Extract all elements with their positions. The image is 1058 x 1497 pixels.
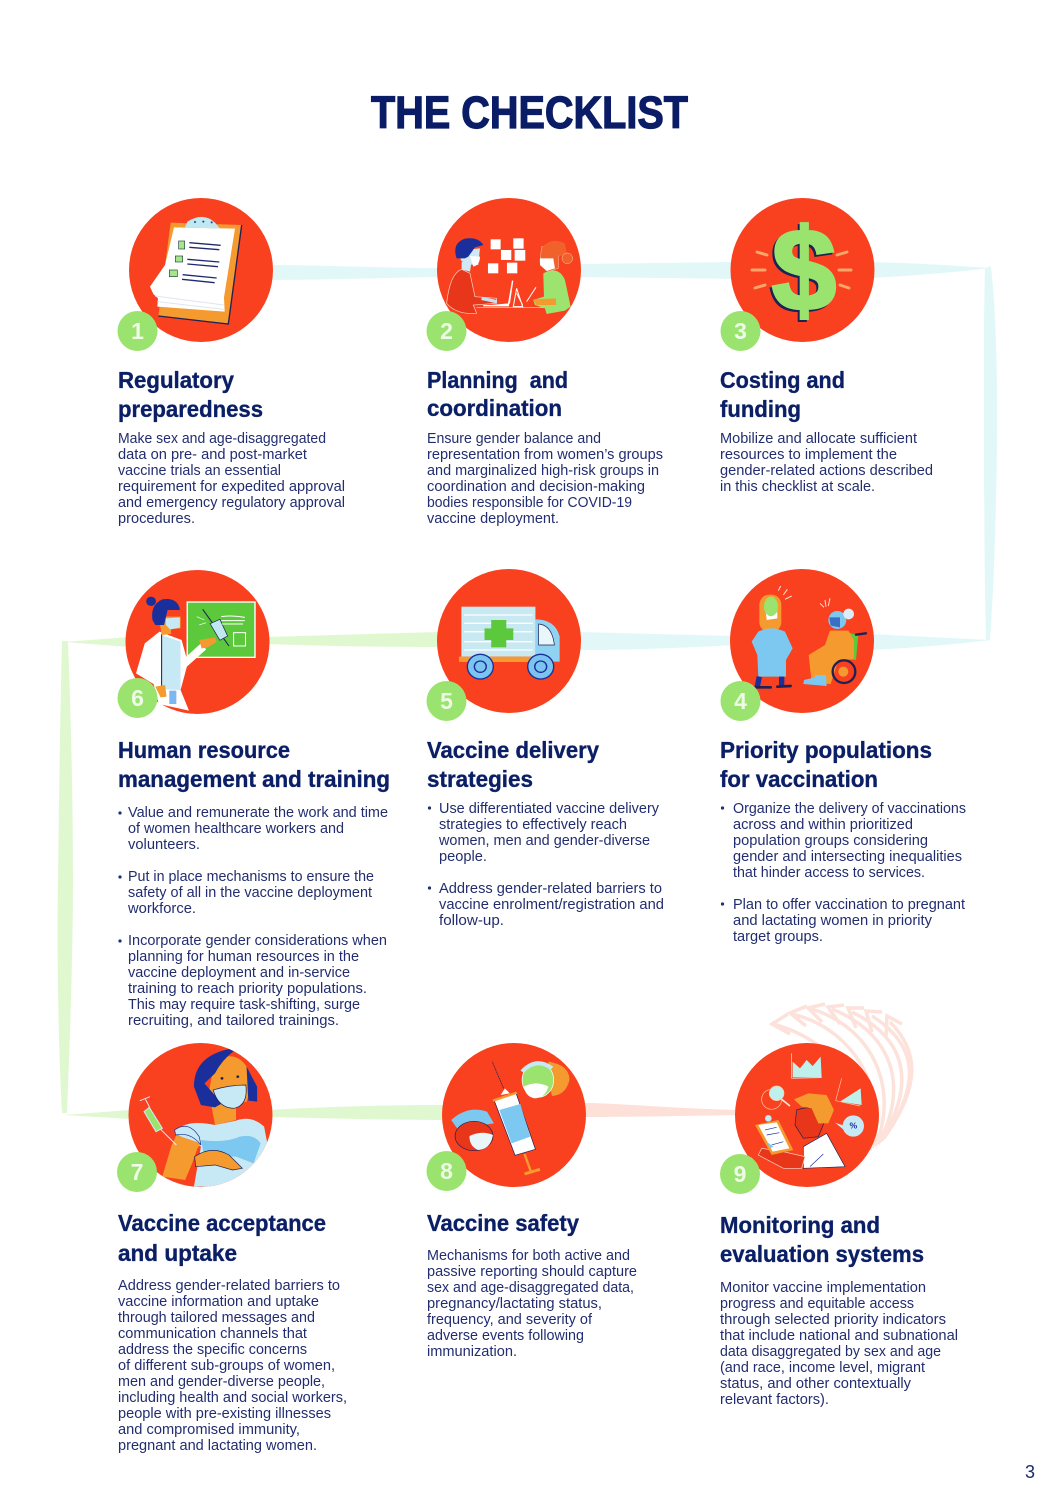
bullet list: target groups. [733, 929, 823, 945]
connector path: cyan segments from step 1 to step 4 [270, 262, 997, 650]
bullet list: vaccine deployment and in-service [128, 965, 350, 981]
body text: requirement for expedited approval [118, 479, 345, 495]
icon: dollar sign: $ [772, 205, 836, 335]
body text: through tailored messages and [118, 1310, 315, 1326]
bullet list: This may require task-shifting, surge [128, 997, 360, 1013]
step number 5 [426, 681, 466, 721]
body text [427, 1248, 637, 1360]
body text: representation from women’s groups [427, 447, 663, 463]
step number 9 [720, 1154, 760, 1194]
heading: Regulatory [118, 367, 234, 393]
heading: Vaccine acceptance [118, 1210, 326, 1236]
step number 7 [117, 1152, 157, 1192]
heading: preparedness [118, 396, 263, 422]
icon: masked woman receiving a vaccine [128, 1043, 272, 1187]
body text: relevant factors). [720, 1392, 829, 1408]
bullet list: volunteers. [128, 837, 200, 853]
body text: data on pre- and post-market [118, 447, 307, 463]
bullet list: Organize the delivery of vaccinations [733, 801, 966, 817]
body text: in this checklist at scale. [720, 479, 875, 495]
bullet list: women, men and gender-diverse [438, 833, 650, 849]
bullet list [118, 805, 388, 1029]
bullet list: of women healthcare workers and [128, 821, 344, 837]
step number 8: 8 [440, 1158, 453, 1184]
body text: vaccine information and uptake [118, 1294, 319, 1310]
heading: evaluation systems [720, 1241, 924, 1267]
panel: step 9 monitoring and evaluation systems [720, 1043, 958, 1408]
icon: ambulance truck [437, 569, 581, 713]
connector path: pale red segment from step 8 to step 9 [582, 1103, 738, 1117]
step number 1 [118, 311, 158, 351]
body text: pregnant and lactating women. [118, 1438, 317, 1454]
heading [720, 367, 845, 422]
body text: address the specific concerns [118, 1342, 307, 1358]
heading: Monitoring and [720, 1212, 880, 1238]
bullet list: workforce. [127, 901, 196, 917]
bullet list: population groups considering [733, 833, 928, 849]
bullet list: Address gender-related barriers to [439, 881, 662, 897]
heading: Costing and [720, 367, 845, 393]
bullet list: recruiting, and tailored trainings. [128, 1013, 339, 1029]
body text: pregnancy/lactating status, [427, 1296, 602, 1312]
body text: bodies responsible for COVID-19 [427, 495, 632, 511]
heading: funding [720, 396, 801, 422]
body text: adverse events following [427, 1328, 584, 1344]
body text: and emergency regulatory approval [118, 495, 345, 511]
heading [720, 737, 932, 792]
body text [720, 1280, 958, 1408]
panel: step 7 vaccine acceptance and uptake [117, 1043, 347, 1454]
step number 8 [426, 1151, 466, 1191]
arrows: return loop above step 9 [772, 1004, 912, 1150]
heading: coordination [427, 395, 562, 421]
heading: management and training [118, 766, 390, 792]
heading [118, 1210, 326, 1266]
icon: dollar sign [730, 198, 874, 342]
heading: Priority populations [720, 737, 932, 763]
body text: that include national and subnational [720, 1328, 958, 1344]
bullet list: Plan to offer vaccination to pregnant [733, 897, 965, 913]
panel: step 1 regulatory preparedness [118, 198, 345, 527]
panel: step 5 vaccine delivery strategies [426, 569, 664, 929]
icon: person reviewing data on a clipboard [735, 1043, 879, 1187]
body text: procedures. [118, 511, 195, 527]
step number 6: 6 [131, 685, 144, 711]
body text: immunization. [427, 1344, 517, 1360]
connector path: green segments from step 5 to step 8 [58, 632, 445, 1120]
panel: step 4 priority populations [720, 569, 966, 945]
bullet list: and lactating women in priority [733, 913, 933, 929]
bullet list: strategies to effectively reach [439, 817, 627, 833]
bullet list: training to reach priority populations. [128, 981, 367, 997]
body text [118, 431, 345, 527]
heading: Planning and [427, 367, 568, 393]
heading [720, 1212, 924, 1267]
panel: step 3 costing and funding [720, 198, 933, 495]
body text: (and race, income level, migrant [720, 1360, 925, 1376]
bullet list: Use differentiated vaccine delivery [439, 801, 660, 817]
icon: clipboard [129, 198, 273, 342]
body text: and marginalized high-risk groups in [427, 463, 659, 479]
heading: Vaccine delivery [427, 737, 599, 763]
panel: step 8 vaccine safety [426, 1043, 637, 1360]
body text: people with pre-existing illnesses [118, 1406, 331, 1422]
step number 5: 5 [440, 688, 453, 714]
step number 4: 4 [734, 688, 747, 714]
body text: vaccine deployment. [427, 511, 559, 527]
icon: woman in hijab and elder in wheelchair [730, 569, 874, 713]
panel: step 2 planning and coordination [426, 198, 663, 527]
step number 9: 9 [734, 1161, 746, 1187]
heading: Vaccine safety [427, 1210, 579, 1236]
icon: person reviewing data on a clipboard: % [849, 1121, 857, 1131]
step number 2: 2 [440, 318, 453, 344]
icon: syringe and two masked faces [442, 1043, 586, 1187]
heading: for vaccination [720, 766, 878, 792]
bullet list: that hinder access to services. [733, 865, 925, 881]
title: THE CHECKLIST [371, 87, 688, 138]
body text: Mobilize and allocate sufficient [720, 431, 917, 447]
page number: 3 [1025, 1462, 1035, 1482]
heading [427, 367, 568, 421]
body text: data disaggregated by sex and age [720, 1344, 941, 1360]
heading: Human resource [118, 737, 290, 763]
icon: dollar sign: $ [770, 207, 834, 337]
body text: coordination and decision-making [427, 479, 645, 495]
body text: men and gender-diverse people, [118, 1374, 325, 1390]
body text: passive reporting should capture [427, 1264, 637, 1280]
body text: vaccine trials an essential [118, 463, 281, 479]
bullet list: gender and intersecting inequalities [733, 849, 962, 865]
bullet list [428, 801, 664, 929]
step number 6 [118, 678, 158, 718]
body text: through selected priority indicators [720, 1312, 946, 1328]
step number 3: 3 [734, 318, 747, 344]
step number 4 [720, 681, 760, 721]
body text: gender-related actions described [720, 463, 933, 479]
icon: two people planning [437, 198, 581, 342]
body text: progress and equitable access [720, 1296, 914, 1312]
body text [720, 431, 933, 495]
step number 7: 7 [131, 1159, 143, 1185]
heading [118, 367, 263, 422]
bullet list: planning for human resources in the [128, 949, 359, 965]
bullet list: Incorporate gender considerations when [128, 933, 387, 949]
heading [118, 737, 390, 792]
bullet list: people. [439, 849, 487, 865]
body text: Mechanisms for both active and [427, 1248, 630, 1264]
body text: communication channels that [118, 1326, 307, 1342]
bullet list [721, 801, 966, 945]
body text: and compromised immunity, [118, 1422, 300, 1438]
heading: and uptake [118, 1240, 237, 1266]
body text: Make sex and age-disaggregated [118, 431, 326, 447]
bullet list: across and within prioritized [733, 817, 913, 833]
body text: including health and social workers, [118, 1390, 347, 1406]
body text: status, and other contextually [720, 1376, 912, 1392]
body text: sex and age-disaggregated data, [427, 1280, 634, 1296]
body text: Address gender-related barriers to [118, 1278, 340, 1294]
step number 3 [720, 311, 760, 351]
body text: Ensure gender balance and [427, 431, 601, 447]
step number 1: 1 [131, 318, 144, 344]
heading: strategies [427, 766, 533, 792]
bullet list: Value and remunerate the work and time [128, 805, 388, 821]
icon: health worker at a green board [126, 570, 270, 714]
bullet list: follow-up. [439, 913, 504, 929]
body text: frequency, and severity of [427, 1312, 593, 1328]
bullet list: vaccine enrolment/registration and [439, 897, 664, 913]
body text: resources to implement the [720, 447, 897, 463]
bullet list: safety of all in the vaccine deployment [128, 885, 372, 901]
body text [118, 1278, 347, 1454]
body text [427, 431, 663, 527]
body text: of different sub-groups of women, [118, 1358, 335, 1374]
body text: Monitor vaccine implementation [720, 1280, 926, 1296]
bullet list: Put in place mechanisms to ensure the [128, 869, 374, 885]
panel: step 6 human resource management and training [118, 570, 390, 1029]
heading [427, 737, 599, 792]
step number 2 [426, 311, 466, 351]
